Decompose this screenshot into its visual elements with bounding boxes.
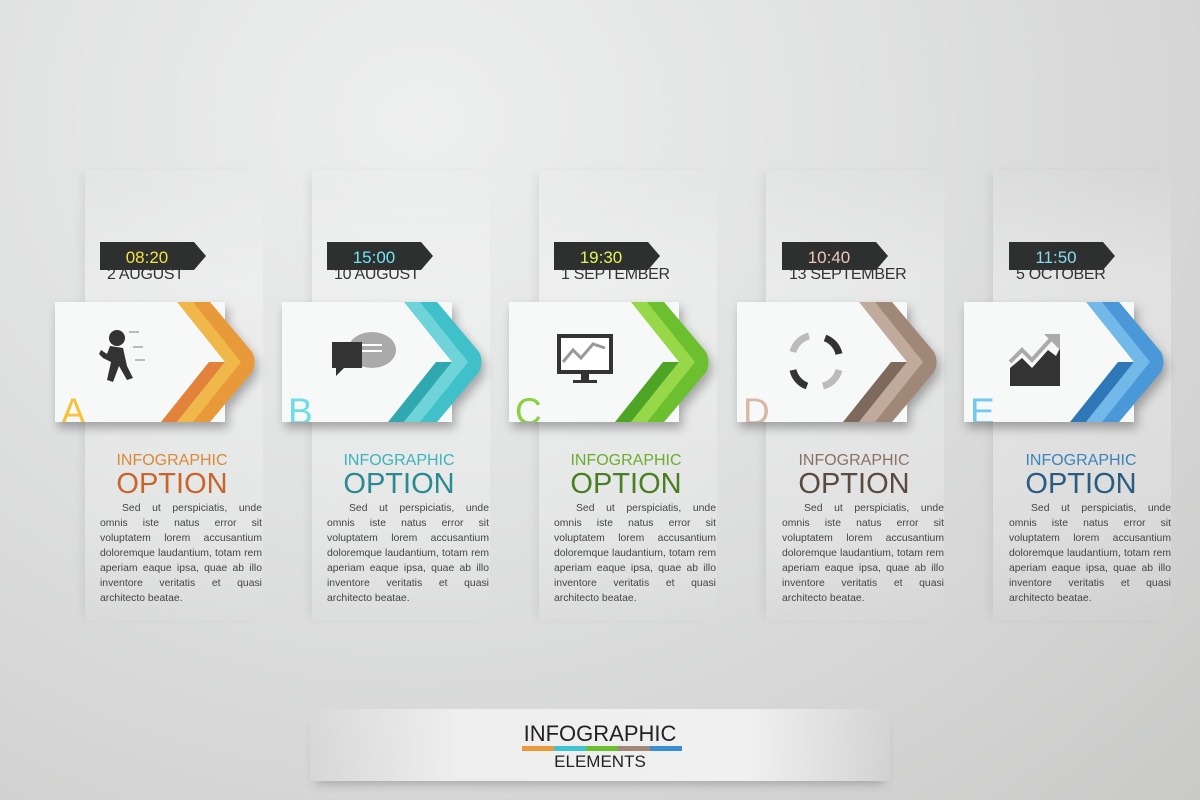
column B: OPTION [343, 468, 455, 500]
date C: 1 SEPTEMBER [561, 266, 670, 283]
text C: Sed ut perspiciatis, unde omnis iste natus error sit voluptatem lorem accusantium doloremque laudantium, totam rem aperiam eaque ipsa, quae ab illo inventore veritatis et quasi architecto beatae. [554, 503, 716, 604]
card D [734, 302, 944, 434]
column D [734, 242, 944, 604]
title D: INFOGRAPHIC [798, 452, 910, 469]
column B [279, 242, 490, 604]
time tag E: 11:50 [1035, 248, 1077, 267]
date B: 10 AUGUST [334, 266, 419, 283]
card C [506, 302, 717, 434]
column C: OPTION [570, 468, 682, 500]
column A: OPTION [116, 468, 228, 500]
time tag D [782, 242, 888, 270]
card E [962, 302, 1172, 434]
time tag A: 08:20 [126, 248, 168, 267]
time tag B: 15:00 [353, 248, 395, 267]
time tag C [554, 242, 660, 270]
column D: OPTION [798, 468, 910, 500]
date A: 2 AUGUST [107, 266, 184, 283]
column C [506, 242, 717, 604]
text A: Sed ut perspiciatis, unde omnis iste natus error sit voluptatem lorem accusantium doloremque laudantium, totam rem aperiam eaque ipsa, quae ab illo inventore veritatis et quasi architecto beatae. [100, 503, 262, 604]
time tag D: 10:40 [808, 248, 850, 267]
title C: INFOGRAPHIC [570, 452, 682, 469]
color bar [522, 746, 682, 751]
column A [52, 242, 263, 604]
banner subtitle: ELEMENTS [554, 752, 646, 771]
text D: Sed ut perspiciatis, unde omnis iste natus error sit voluptatem lorem accusantium doloremque laudantium, totam rem aperiam eaque ipsa, quae ab illo inventore veritatis et quasi architecto beatae. [782, 503, 944, 604]
bottom banner [310, 709, 890, 781]
time tag B [327, 242, 433, 270]
banner title: INFOGRAPHIC [524, 721, 676, 746]
card B [279, 302, 490, 434]
text E: Sed ut perspiciatis, unde omnis iste natus error sit voluptatem lorem accusantium doloremque laudantium, totam rem aperiam eaque ipsa, quae ab illo inventore veritatis et quasi architecto beatae. [1009, 503, 1171, 604]
column E: OPTION [1025, 468, 1137, 500]
title A: INFOGRAPHIC [116, 452, 228, 469]
time tag E [1009, 242, 1115, 270]
time tag A [100, 242, 206, 270]
title E: INFOGRAPHIC [1025, 452, 1137, 469]
time tag C: 19:30 [580, 248, 622, 267]
date D: 13 SEPTEMBER [789, 266, 906, 283]
column E [962, 242, 1172, 604]
card A [52, 302, 263, 434]
date E: 5 OCTOBER [1016, 266, 1105, 283]
title B: INFOGRAPHIC [343, 452, 455, 469]
text B: Sed ut perspiciatis, unde omnis iste natus error sit voluptatem lorem accusantium doloremque laudantium, totam rem aperiam eaque ipsa, quae ab illo inventore veritatis et quasi architecto beatae. [327, 503, 489, 604]
